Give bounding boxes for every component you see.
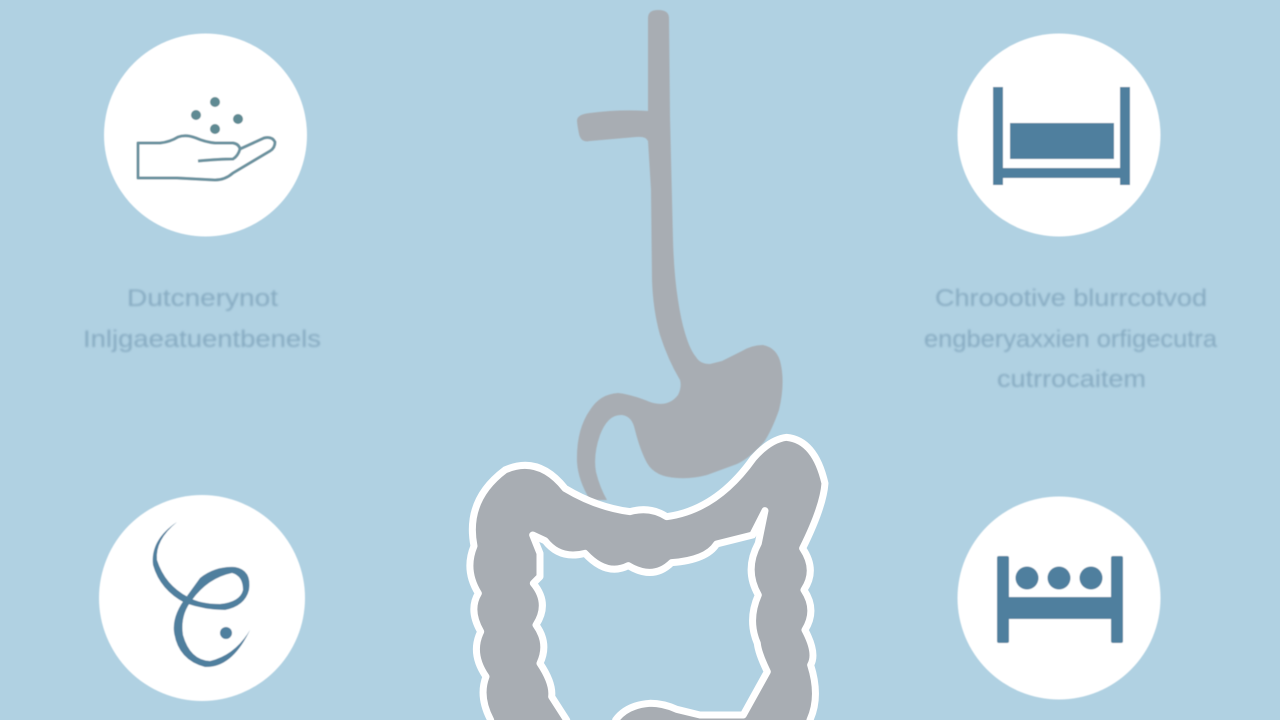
icon: hand with falling dots	[104, 34, 307, 236]
icon: bed with three dots	[958, 496, 1160, 700]
text block: left caption: Dutcnerynot	[127, 285, 278, 312]
text block: left caption	[83, 285, 321, 353]
text block: right caption: engberyaxxien orfigecutra	[924, 326, 1218, 353]
icon: bed with mattress	[958, 34, 1160, 236]
icon: swirl with dot	[99, 495, 305, 701]
text block: right caption: cutrrocaitem	[997, 366, 1146, 393]
text block: left caption: Inljgaeatuentbenels	[83, 326, 321, 353]
text block: right caption	[924, 285, 1218, 393]
text block: right caption: Chroootive blurrcotvod	[935, 285, 1207, 312]
esophagus and stomach	[577, 10, 783, 500]
colon	[470, 437, 825, 720]
